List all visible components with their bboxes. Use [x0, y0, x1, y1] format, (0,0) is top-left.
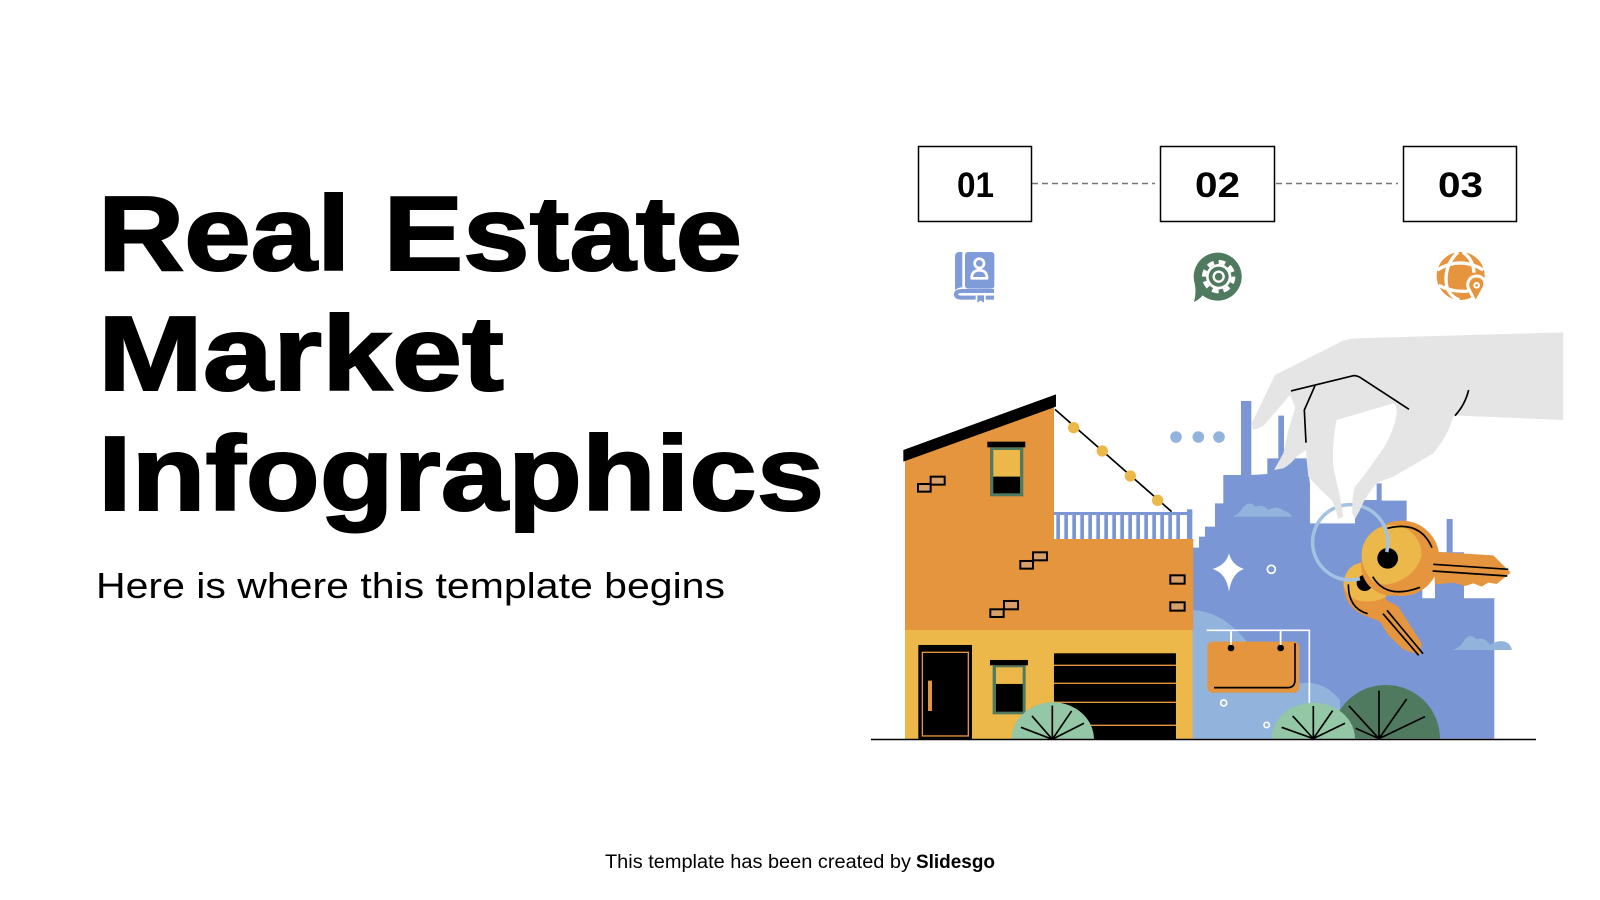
icon: gear chat bubble	[1194, 253, 1242, 302]
step box 01	[918, 146, 1032, 222]
title: Real Estate	[98, 175, 742, 293]
garage door	[1054, 653, 1176, 739]
illustration: house and keys	[871, 332, 1563, 740]
string lights	[1055, 409, 1172, 512]
front key	[1361, 521, 1511, 596]
title: Infographics	[98, 415, 824, 533]
footer credit: Slidesgo	[916, 852, 995, 873]
title: Market	[98, 295, 504, 413]
hand	[1252, 332, 1563, 519]
clouds	[1232, 504, 1292, 517]
railing	[1054, 509, 1192, 539]
icon: contact book	[955, 252, 994, 303]
bush light left	[1012, 702, 1094, 739]
yellow ground floor	[905, 628, 1193, 739]
step connectors	[1032, 182, 1398, 184]
roof	[903, 394, 1056, 462]
step box 01: 01	[957, 166, 994, 205]
back key	[1343, 563, 1423, 655]
bush dark	[1332, 685, 1440, 739]
title	[98, 175, 824, 533]
upper window	[987, 442, 1025, 496]
small rings	[1221, 565, 1275, 728]
light blue hills	[1193, 610, 1340, 739]
step box 02	[1160, 146, 1274, 222]
hanging sign, bushes, keys and hand	[1207, 630, 1440, 739]
key ring	[1313, 505, 1388, 580]
house	[903, 394, 1193, 739]
bricks	[918, 477, 1185, 617]
bush light right	[1272, 703, 1355, 739]
step box 03: 03	[1438, 166, 1483, 205]
dots	[1170, 431, 1225, 443]
orange upper floors	[905, 407, 1193, 630]
keys	[1343, 521, 1511, 655]
city skyline	[1193, 401, 1512, 739]
door	[918, 645, 972, 739]
hanging sign	[1207, 632, 1299, 693]
ground line	[871, 738, 1536, 740]
lower window	[990, 660, 1028, 714]
sign hanger	[1207, 630, 1309, 703]
star	[1213, 553, 1244, 592]
step box 03	[1404, 146, 1516, 222]
icon: globe with pin	[1437, 252, 1485, 303]
subtitle: Here is where this template begins	[96, 565, 725, 606]
footer credit: This template has been created by	[605, 852, 912, 873]
step box 02: 02	[1195, 166, 1240, 205]
